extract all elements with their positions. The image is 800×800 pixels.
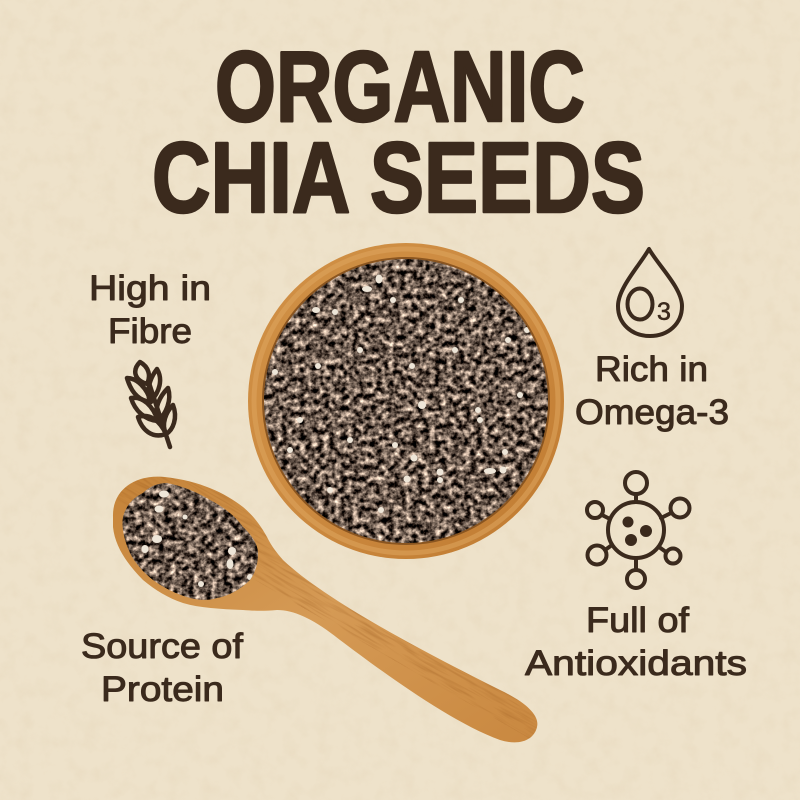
- label: full of antioxidants: Full of: [586, 601, 689, 640]
- label: source of protein: [81, 627, 243, 709]
- title: [152, 31, 645, 234]
- label: rich in omega-3: [575, 350, 729, 432]
- label: full of antioxidants: Antioxidants: [525, 644, 747, 683]
- label: high in fibre: [89, 269, 211, 351]
- spoon seeds: [120, 480, 260, 602]
- spoon wood grain: [121, 476, 530, 738]
- icon: omega-3 drop: [618, 249, 682, 336]
- icon: wheat: [127, 362, 175, 447]
- title: ORGANIC: [215, 31, 585, 143]
- label: full of antioxidants: [525, 601, 747, 683]
- icon: antioxidant molecule: [587, 472, 690, 588]
- label: source of protein: Source of: [81, 627, 243, 666]
- wooden spoon: [113, 476, 538, 742]
- white seeds: [272, 274, 530, 513]
- title: CHIA SEEDS: [152, 122, 645, 234]
- infographic canvas: [82, 50, 746, 742]
- label: rich in omega-3: Rich in: [595, 350, 708, 389]
- label: high in fibre: Fibre: [108, 312, 192, 351]
- label: rich in omega-3: Omega-3: [575, 393, 729, 432]
- label: source of protein: Protein: [101, 670, 224, 709]
- icon: omega-3 drop: 3: [657, 298, 671, 326]
- bowl of chia seeds: [248, 243, 564, 559]
- label: high in fibre: High in: [89, 269, 211, 308]
